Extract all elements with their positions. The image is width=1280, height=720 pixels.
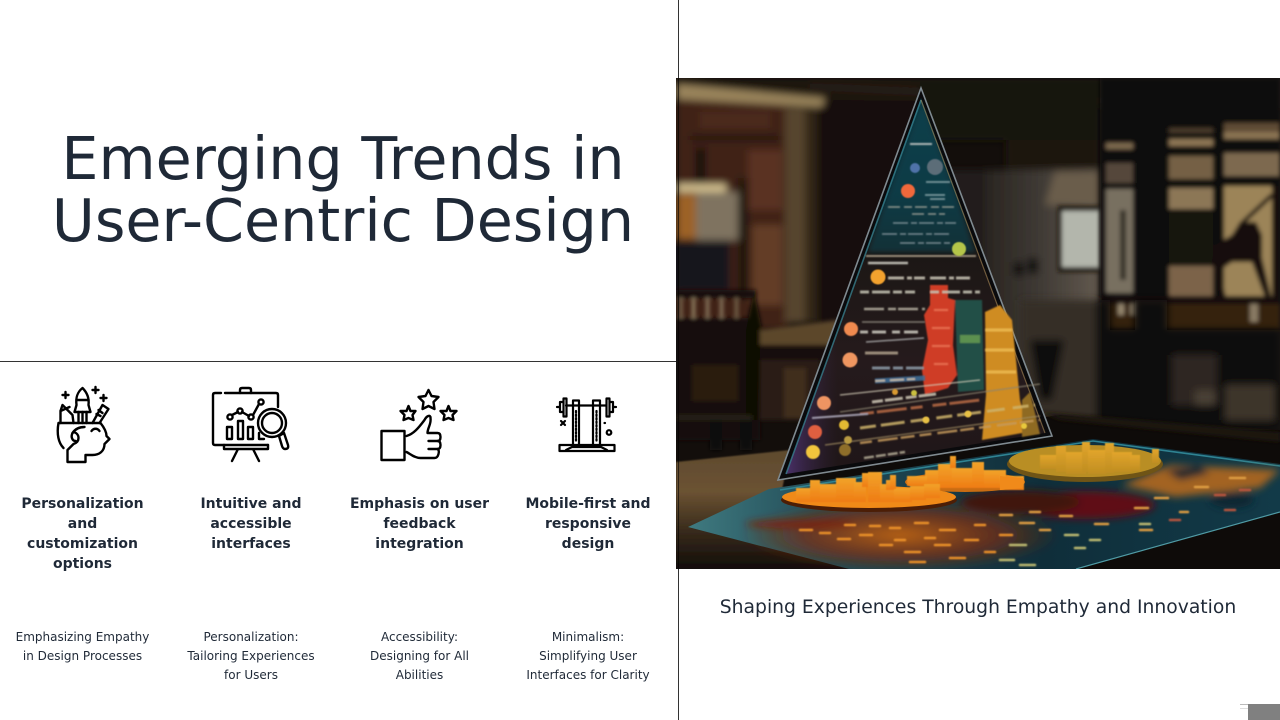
pyramid text rows xyxy=(812,144,1040,458)
description: for Users xyxy=(224,668,278,682)
description: Simplifying User xyxy=(539,649,637,663)
label: responsive xyxy=(545,516,631,532)
panel: trend columns xyxy=(16,386,651,682)
description: Emphasizing Empathy xyxy=(16,630,149,644)
description: Interfaces for Clarity xyxy=(526,668,650,682)
label: design xyxy=(562,536,614,552)
label xyxy=(350,496,489,552)
description xyxy=(16,630,149,663)
column: mobile-first xyxy=(525,397,651,682)
icon: presentation board with magnifier xyxy=(212,386,290,462)
label: accessible xyxy=(210,516,292,532)
pyramid dots xyxy=(806,159,1027,459)
description: Personalization: xyxy=(203,630,299,644)
tabletop xyxy=(676,412,1280,569)
description: Abilities xyxy=(396,668,443,682)
label: feedback xyxy=(383,516,456,532)
title: Emerging Trends in xyxy=(61,125,625,193)
corner marker xyxy=(1240,704,1280,720)
description: Designing for All xyxy=(370,649,469,663)
label: and xyxy=(68,516,97,532)
window wall xyxy=(1100,78,1280,330)
glass pyramid xyxy=(778,88,1052,480)
label: integration xyxy=(375,536,464,552)
caption: Shaping Experiences Through Empathy and Innovation xyxy=(720,597,1236,618)
icon: barbell on rack xyxy=(556,397,618,452)
description xyxy=(526,630,650,682)
column: personalization xyxy=(16,386,149,663)
label xyxy=(200,496,302,552)
column: interfaces xyxy=(187,386,315,682)
photo: glass pyramid and illuminated city map xyxy=(676,78,1280,569)
description xyxy=(187,630,315,682)
label: interfaces xyxy=(211,536,291,552)
description: Accessibility: xyxy=(381,630,458,644)
label: Emphasis on user xyxy=(350,496,489,512)
map light specks xyxy=(800,478,1250,565)
column: feedback xyxy=(350,388,489,682)
description: Minimalism: xyxy=(552,630,624,644)
label xyxy=(525,496,651,552)
description xyxy=(370,630,469,682)
label: options xyxy=(53,556,112,572)
label: Mobile-first and xyxy=(525,496,651,512)
label: Intuitive and xyxy=(200,496,302,512)
city discs xyxy=(781,442,1163,512)
title xyxy=(52,125,634,255)
label xyxy=(21,496,144,572)
description: in Design Processes xyxy=(23,649,142,663)
icon: head with creative tools xyxy=(56,386,111,464)
data columns xyxy=(922,285,1040,440)
city reflections xyxy=(800,499,1010,521)
label: Personalization xyxy=(21,496,144,512)
left chair and table xyxy=(676,290,838,450)
illuminated map xyxy=(688,439,1280,571)
label: customization xyxy=(27,536,138,552)
blurred room background xyxy=(676,78,1280,450)
picture frame xyxy=(1058,206,1100,272)
description: Tailoring Experiences xyxy=(187,649,315,663)
icon: thumbs up with stars xyxy=(380,388,458,462)
title: User-Centric Design xyxy=(52,187,634,255)
